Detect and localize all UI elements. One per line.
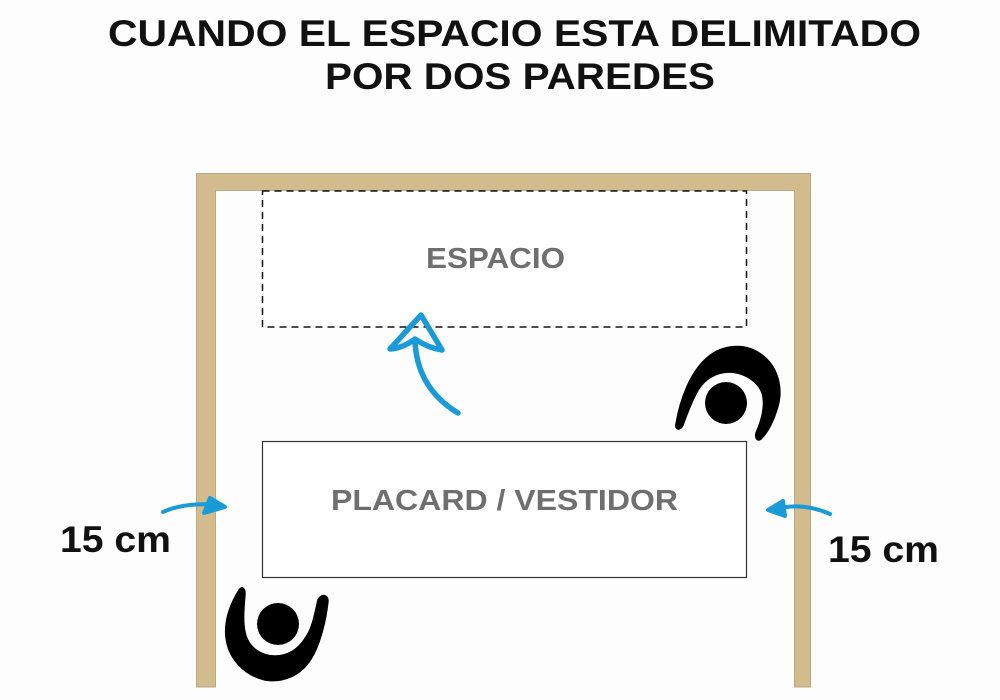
label: placard / vestidor: PLACARD / VESTIDOR [331,485,678,517]
arrow: move upward [390,315,458,413]
label: left 15 cm: 15 cm [60,519,171,560]
arrow: right clearance [768,501,830,516]
label: espacio: ESPACIO [426,243,565,275]
walls [196,174,810,687]
icon: person top right [676,347,780,440]
arrow: left clearance [163,498,225,513]
title [108,13,921,97]
label: right 15 cm: 15 cm [828,529,939,570]
panel: placard / vestidor [262,442,746,578]
panel: espacio [262,191,746,327]
title: CUANDO EL ESPACIO ESTA DELIMITADO [108,13,921,54]
title: POR DOS PAREDES [325,56,715,97]
icon: person bottom left [226,588,328,681]
